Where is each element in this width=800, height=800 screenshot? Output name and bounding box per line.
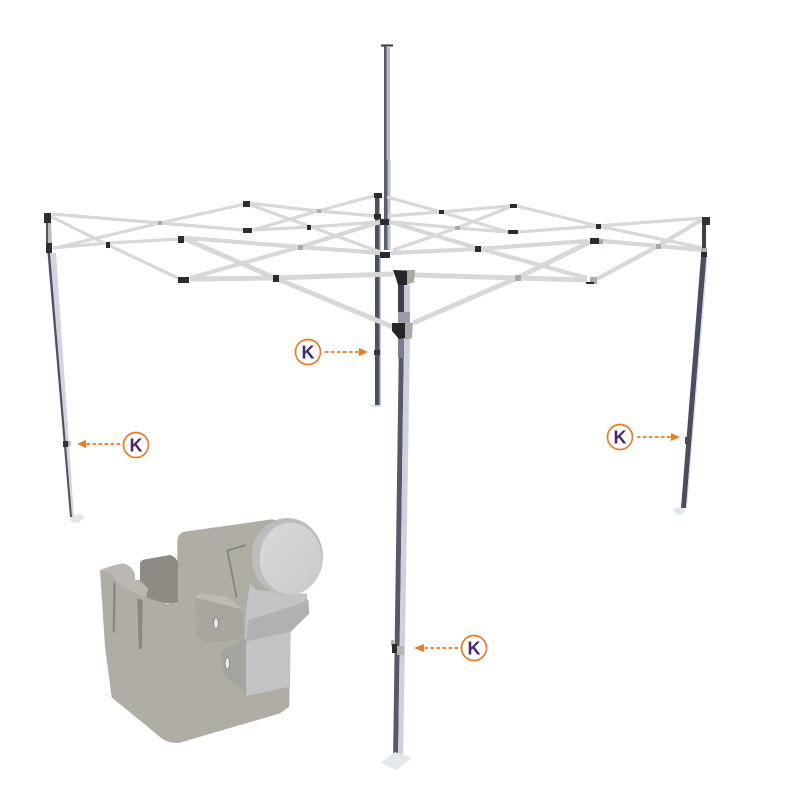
callout K: left leg bbox=[77, 432, 148, 458]
weight: round knob bbox=[252, 518, 323, 595]
callout K: front leg bbox=[414, 636, 486, 660]
weight: rear wall bbox=[177, 519, 300, 640]
weight: main body bbox=[100, 563, 290, 743]
front leg: lower bracket bbox=[405, 323, 413, 340]
weight: slits bbox=[113, 582, 116, 633]
centre pole bbox=[381, 44, 393, 250]
weight: front clip block bbox=[195, 597, 243, 643]
front leg bbox=[381, 270, 415, 770]
callout K: right leg bbox=[608, 424, 680, 450]
front leg: clamp bbox=[391, 640, 394, 646]
callout K: right leg: K bbox=[614, 428, 626, 448]
weight: inner slot bbox=[140, 555, 178, 604]
front leg: top bracket bbox=[393, 270, 415, 285]
front leg: upper sleeve bbox=[398, 285, 404, 312]
right leg bbox=[673, 217, 710, 515]
weight: metal bracket bbox=[243, 583, 309, 696]
truss joints bbox=[106, 193, 661, 284]
weight: bracket flange bbox=[222, 638, 246, 696]
weight: bracket band bbox=[246, 600, 309, 642]
callout K: left leg: K bbox=[130, 436, 142, 456]
callout K: back leg: K bbox=[302, 342, 314, 362]
left leg bbox=[44, 213, 85, 523]
weight: bent wire bbox=[227, 545, 246, 597]
weight: top lips bbox=[100, 563, 148, 597]
callout K: front leg: K bbox=[468, 638, 480, 658]
callout K: back leg bbox=[296, 340, 368, 364]
roof truss bars bbox=[50, 195, 703, 327]
back leg bbox=[371, 198, 382, 407]
leg weight illustration bbox=[100, 518, 323, 743]
